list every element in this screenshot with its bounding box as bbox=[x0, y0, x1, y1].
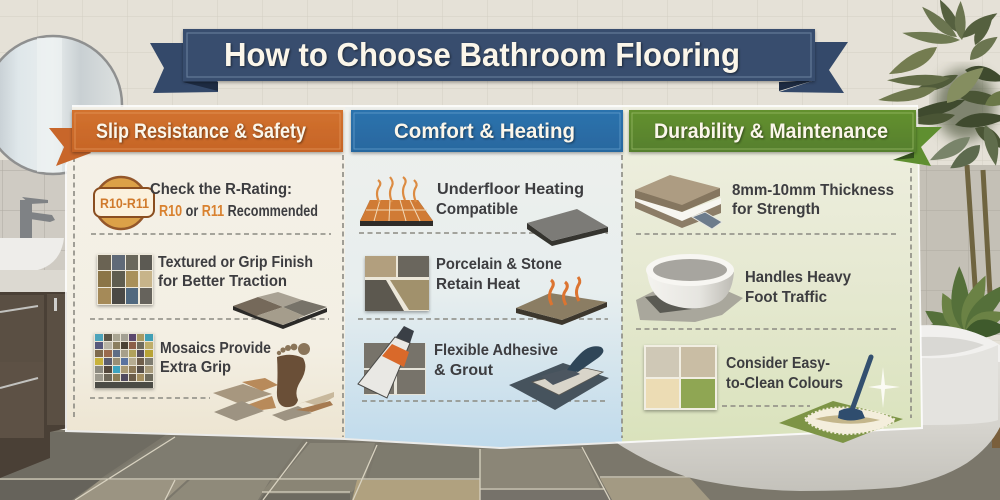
text: easy to clean colours: to-Clean Colours bbox=[726, 375, 843, 392]
vanity counter bbox=[0, 270, 68, 296]
text: textured or grip finish: Textured or Grip Finish bbox=[158, 254, 313, 271]
banner body bbox=[183, 29, 815, 81]
text: flexible adhesive and grout: Flexible Adhesive bbox=[434, 342, 558, 359]
icon: R10-R11 badge: R10-R11 bbox=[100, 195, 149, 211]
text: thickness for strength: 8mm-10mm Thickness bbox=[732, 182, 894, 199]
faucet bbox=[20, 197, 55, 238]
text: check the R-rating: R10 or R11 Recommended bbox=[159, 203, 318, 220]
vanity sink basin bbox=[0, 238, 64, 272]
column 2 header: Comfort & Heating bbox=[351, 110, 623, 152]
text: mosaics provide extra grip: Mosaics Provide bbox=[160, 340, 271, 357]
text: easy to clean colours bbox=[726, 355, 843, 392]
icon: porcelain and stone sample bbox=[365, 256, 429, 311]
text: handles heavy foot traffic bbox=[745, 269, 851, 306]
text: easy to clean colours: Consider Easy- bbox=[726, 355, 830, 372]
bathtub bbox=[612, 325, 1000, 491]
vanity cabinet bbox=[0, 292, 68, 478]
icon: heavy basin on tiles bbox=[636, 254, 743, 322]
plant: tall palm bbox=[877, 0, 1000, 330]
text: mosaics provide extra grip: Extra Grip bbox=[160, 359, 231, 376]
banner right tail bbox=[779, 42, 848, 93]
icon: mop on green mat with sparkle bbox=[779, 357, 903, 443]
text: porcelain and stone retain heat: Porcelain & Stone bbox=[436, 256, 562, 273]
text: porcelain and stone retain heat: Retain Heat bbox=[436, 276, 521, 293]
dashed column and row dividers bbox=[74, 155, 911, 438]
icon: notched trowel on slab bbox=[509, 346, 609, 410]
icon: stacked stone thickness bbox=[635, 175, 722, 229]
text: thickness for strength: for Strength bbox=[732, 201, 820, 218]
title banner bbox=[150, 29, 848, 93]
text: check the R-rating bbox=[150, 181, 318, 220]
icon: textured tile sample bbox=[97, 254, 153, 305]
text: textured or grip finish bbox=[158, 254, 313, 290]
icon: R10-R11 badge bbox=[94, 177, 154, 229]
icon: adhesive tube on tile bbox=[358, 326, 426, 398]
text: handles heavy foot traffic: Foot Traffic bbox=[745, 289, 827, 306]
text: thickness for strength bbox=[732, 182, 894, 218]
icon: heated tile with rising steam bbox=[360, 177, 433, 226]
background: stone tile floor bbox=[0, 430, 1000, 500]
column 2 header: Comfort & Heating: Comfort & Heating bbox=[394, 120, 575, 143]
text: underfloor heating compatible bbox=[436, 181, 584, 218]
icon: footprint on mosaic tiles bbox=[213, 343, 334, 421]
icon: stone tile square bbox=[233, 292, 327, 329]
plant: low leafy shrub bbox=[920, 266, 1000, 343]
icon: mosaic tile sheet bbox=[94, 333, 154, 388]
column 1 header: Slip Resistance & Safety bbox=[49, 110, 343, 166]
text: flexible adhesive and grout: & Grout bbox=[434, 362, 494, 379]
text: porcelain and stone retain heat bbox=[436, 256, 562, 293]
wooden stand behind bathtub bbox=[992, 380, 1000, 448]
text: handles heavy foot traffic: Handles Heavy bbox=[745, 269, 851, 286]
icon: gray stone slab bbox=[527, 209, 608, 246]
text: underfloor heating compatible: Underfloor Heating bbox=[437, 181, 584, 198]
text: underfloor heating compatible: Compatible bbox=[436, 201, 518, 218]
icon: colour tile swatches bbox=[644, 345, 717, 410]
title: How to Choose Bathroom Flooring bbox=[224, 36, 740, 73]
text: textured or grip finish: for Better Traction bbox=[158, 273, 287, 290]
panel: paper board with three columns bbox=[60, 100, 923, 450]
text: mosaics provide extra grip bbox=[160, 340, 271, 376]
column 1 header: Slip Resistance & Safety: Slip Resistance & Safety bbox=[96, 120, 306, 143]
mirror bbox=[0, 36, 122, 174]
icon: heated stone slab bbox=[516, 277, 607, 325]
column 3 header: Durability & Maintenance bbox=[629, 110, 942, 166]
text: flexible adhesive and grout bbox=[434, 342, 558, 379]
banner left tail bbox=[150, 43, 218, 93]
column 3 header: Durability & Maintenance: Durability & Maintenance bbox=[654, 120, 888, 143]
text: check the R-rating: Check the R-Rating: bbox=[150, 181, 292, 198]
